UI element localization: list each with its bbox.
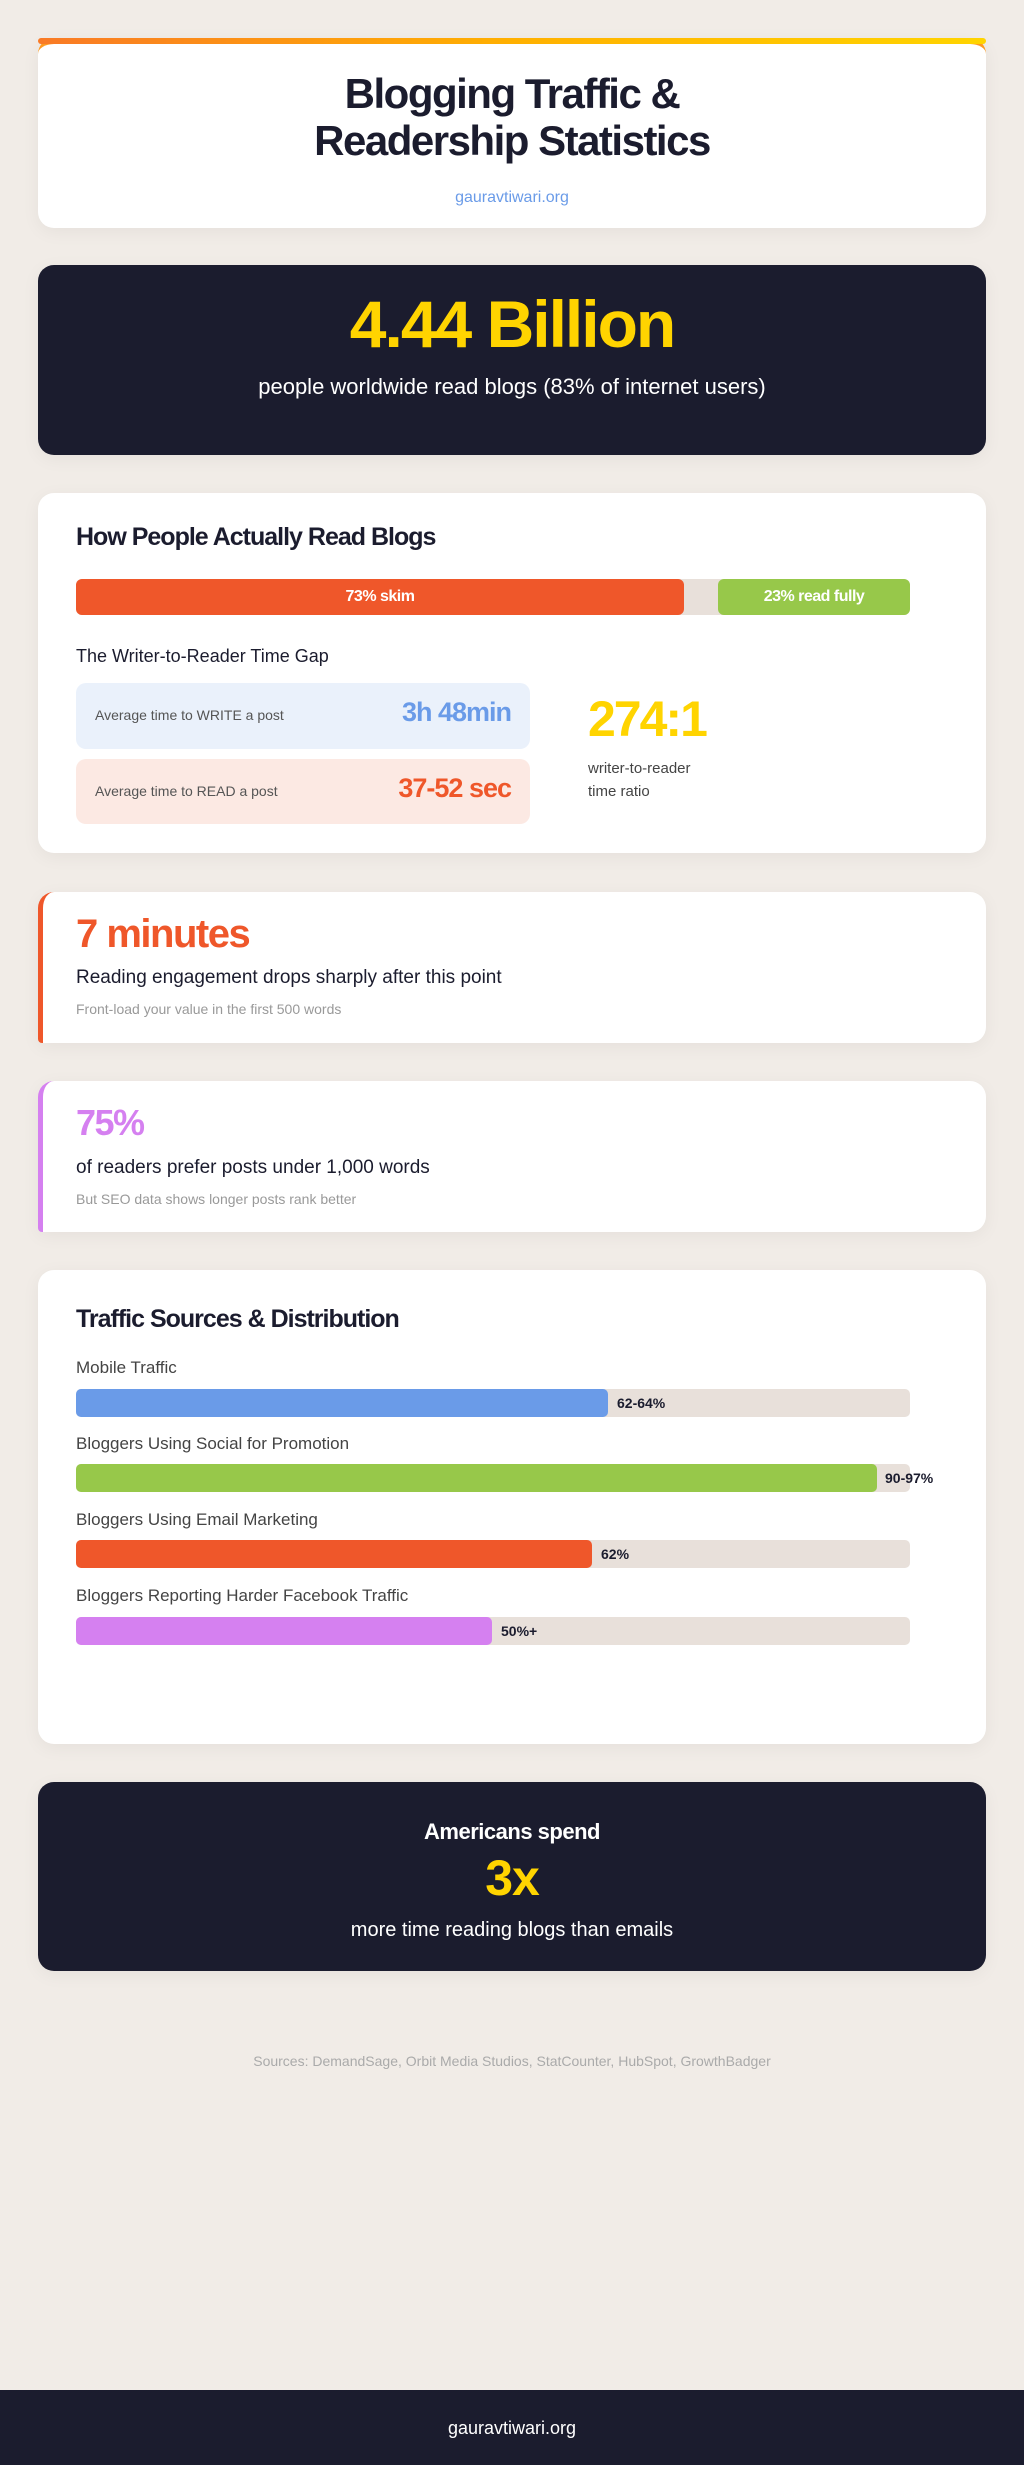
title: Blogging Traffic & <box>345 70 679 117</box>
skim vs read bar: 23% read fully <box>764 588 864 605</box>
write time box: 3h 48min <box>402 697 511 727</box>
ratio stat <box>588 691 707 800</box>
panel: traffic sources: 50%+ <box>501 1623 537 1639</box>
footer: gauravtiwari.org <box>448 2418 576 2438</box>
ratio stat: 274:1 <box>588 691 706 747</box>
read time box: 37-52 sec <box>398 773 511 803</box>
heading: Traffic Sources & Distribution <box>76 1305 399 1333</box>
top gradient bar <box>38 38 986 44</box>
note: But SEO data shows longer posts rank better <box>76 1191 356 1207</box>
stat description: people worldwide read blogs (83% of internet users) <box>258 374 766 399</box>
note: Front-load your value in the first 500 words <box>76 1001 341 1017</box>
panel: traffic sources: 90-97% <box>885 1470 933 1486</box>
big stat: 4.44 Billion <box>350 287 674 361</box>
header card <box>38 38 986 228</box>
footer <box>0 2390 1024 2465</box>
panel: americans 3x <box>38 1782 986 1971</box>
description: more time reading blogs than emails <box>351 1919 673 1941</box>
panel: traffic sources <box>38 1270 986 1744</box>
bar: mobile: Mobile Traffic <box>76 1358 177 1377</box>
panel: 75% <box>38 1081 986 1232</box>
title <box>314 70 710 164</box>
read time box: Average time to READ a post <box>95 783 278 799</box>
bar: facebook: Bloggers Reporting Harder Facebook Traffic <box>76 1586 408 1605</box>
read time box <box>76 759 530 824</box>
stat: 75% <box>76 1102 144 1143</box>
heading: How People Actually Read Blogs <box>76 523 435 551</box>
stat: 3x <box>485 1850 539 1906</box>
write time box: Average time to WRITE a post <box>95 707 284 723</box>
ratio stat: time ratio <box>588 783 650 800</box>
write time box <box>76 683 530 749</box>
panel: how people read <box>38 493 986 853</box>
bar: email: Bloggers Using Email Marketing <box>76 1510 318 1529</box>
site url: gauravtiwari.org <box>455 189 569 206</box>
panel: traffic sources: 62% <box>601 1546 629 1562</box>
sources: Sources: DemandSage, Orbit Media Studios, StatCounter, HubSpot, GrowthBadger <box>253 2053 771 2069</box>
panel: 4.44 billion <box>38 265 986 455</box>
lead text: Americans spend <box>424 1819 600 1844</box>
title: Readership Statistics <box>314 117 710 164</box>
description: Reading engagement drops sharply after this point <box>76 967 502 988</box>
skim vs read bar: 73% skim <box>346 588 414 605</box>
subheading: The Writer-to-Reader Time Gap <box>76 646 329 666</box>
stat: 7 minutes <box>76 912 249 956</box>
panel: traffic sources: 62-64% <box>617 1395 665 1411</box>
description: of readers prefer posts under 1,000 words <box>76 1157 430 1178</box>
bar: social: Bloggers Using Social for Promotion <box>76 1434 349 1453</box>
ratio stat: writer-to-reader <box>588 760 691 777</box>
skim vs read bar <box>76 579 910 615</box>
panel: 7 minutes <box>38 892 986 1043</box>
